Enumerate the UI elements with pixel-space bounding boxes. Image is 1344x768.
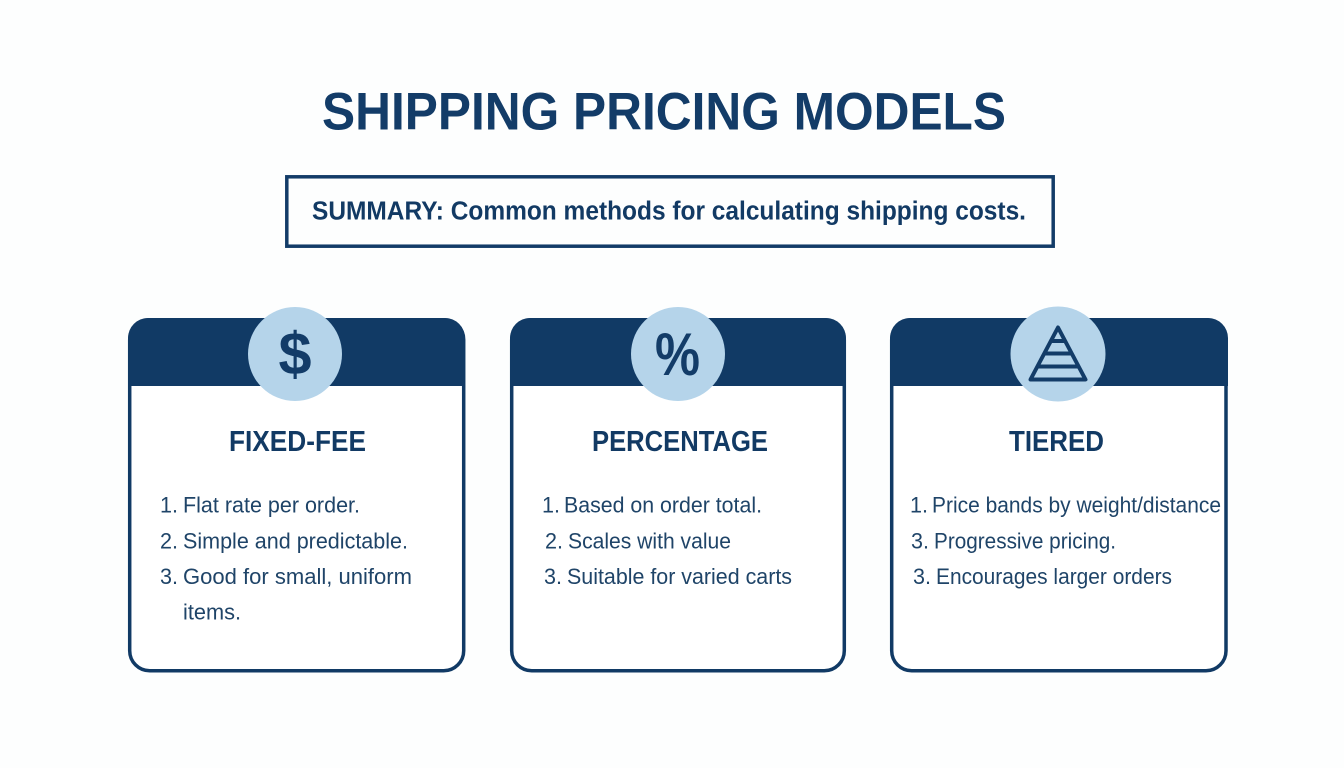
panel: fixed-fee	[128, 307, 465, 671]
list: fixed-fee points: Simple and predictable.	[183, 528, 408, 554]
list: tiered points: 3.	[913, 564, 931, 589]
list: tiered points: Price bands by weight/distance	[932, 492, 1221, 518]
list: tiered points: 3.	[911, 528, 929, 554]
list: percentage points: Scales with value	[568, 528, 731, 554]
list: fixed-fee points: items.	[183, 600, 241, 624]
icon: dollar sign	[248, 307, 342, 401]
title: SHIPPING PRICING MODELS	[322, 82, 1006, 142]
list: percentage points: 2.	[545, 528, 563, 554]
list: tiered points	[910, 492, 1221, 589]
panel: tiered	[890, 306, 1228, 671]
heading: percentage: PERCENTAGE	[592, 426, 768, 458]
icon: dollar sign: $	[278, 320, 312, 388]
list: percentage points: Suitable for varied carts	[567, 564, 792, 589]
list: percentage points: 1.	[542, 492, 560, 518]
summary box: SUMMARY: Common methods for calculating shipping costs.	[312, 198, 1026, 226]
list: percentage points: Based on order total.	[564, 492, 762, 518]
icon: pyramid	[1010, 306, 1106, 402]
list: fixed-fee points: 2.	[160, 528, 178, 554]
icon: percent sign: %	[655, 321, 700, 388]
card header band	[510, 318, 846, 386]
card header band	[128, 318, 465, 386]
card body	[130, 320, 464, 671]
list: percentage points: 3.	[544, 564, 562, 589]
heading: tiered: TIERED	[1009, 426, 1104, 458]
list: fixed-fee points: 1.	[160, 492, 178, 518]
heading: fixed-fee: FIXED-FEE	[229, 426, 366, 458]
list: fixed-fee points: Good for small, uniform	[183, 564, 412, 589]
icon: percent sign	[631, 307, 725, 401]
summary box	[287, 177, 1053, 246]
list: tiered points: 1.	[910, 492, 928, 518]
list: fixed-fee points: 3.	[160, 564, 178, 589]
list: percentage points	[542, 492, 792, 589]
card body	[892, 320, 1226, 671]
panel: percentage	[510, 307, 846, 671]
list: tiered points: Progressive pricing.	[934, 528, 1116, 554]
card header band	[890, 318, 1228, 386]
list: fixed-fee points: Flat rate per order.	[183, 492, 360, 518]
list: tiered points: Encourages larger orders	[936, 564, 1172, 589]
card body	[512, 320, 844, 671]
list: fixed-fee points	[160, 492, 412, 624]
